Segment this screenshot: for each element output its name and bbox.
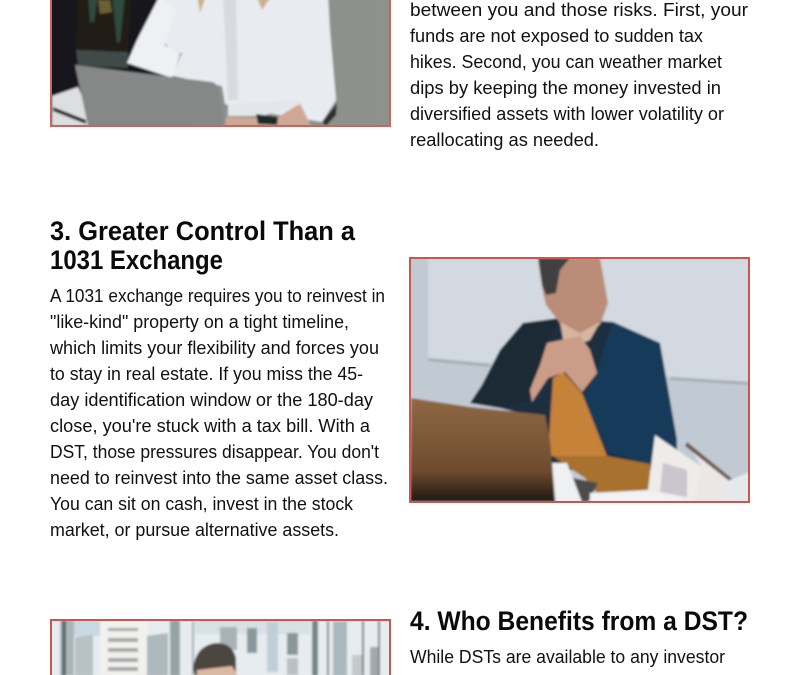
heading: section 4: 4. Who Benefits from a DST? bbox=[410, 606, 748, 636]
photo: woman in white shirt at laptop bbox=[50, 0, 392, 128]
text block: section 2 continued: dips by keeping the money invested in bbox=[410, 78, 721, 98]
photo: man in office with city view bbox=[50, 619, 392, 675]
text block: section 3 body: "like-kind" property on a tight timeline, bbox=[50, 312, 349, 332]
text block: section 3 body: DST, those pressures disappear. You don't bbox=[50, 442, 379, 462]
text block: section 2 continued: reallocating as needed. bbox=[410, 130, 599, 150]
text block: section 3 body bbox=[49, 286, 388, 540]
text block: section 3 body: You can sit on cash, invest in the stock bbox=[50, 494, 354, 514]
heading: section 3 bbox=[50, 216, 356, 275]
heading: section 3: 1031 Exchange bbox=[50, 245, 223, 275]
text block: section 3 body: to stay in real estate. If you miss the 45- bbox=[50, 364, 363, 384]
heading: section 3: 3. Greater Control Than a bbox=[50, 216, 356, 246]
text block: section 4 body: While DSTs are available to any investor bbox=[410, 647, 725, 667]
text block: section 3 body: which limits your flexibility and forces you bbox=[49, 338, 379, 358]
text block: section 2 continued: diversified assets with lower volatility or bbox=[410, 104, 724, 124]
text block: section 3 body: day identification window or the 180-day bbox=[50, 390, 373, 410]
text block: section 2 continued: hikes. Second, you can weather market bbox=[410, 52, 722, 72]
text block: section 2 continued bbox=[410, 0, 748, 150]
text block: section 2 continued: between you and those risks. First, your bbox=[410, 0, 748, 20]
photo: man thinking at laptop bbox=[409, 257, 751, 504]
text block: section 3 body: close, you're stuck with a tax bill. With a bbox=[50, 416, 371, 436]
text block: section 3 body: A 1031 exchange requires you to reinvest in bbox=[50, 286, 385, 306]
text block: section 3 body: need to reinvest into the same asset class. bbox=[50, 468, 388, 488]
text block: section 3 body: market, or pursue alternative assets. bbox=[50, 520, 339, 540]
text block: section 2 continued: funds are not exposed to sudden tax bbox=[410, 26, 703, 46]
